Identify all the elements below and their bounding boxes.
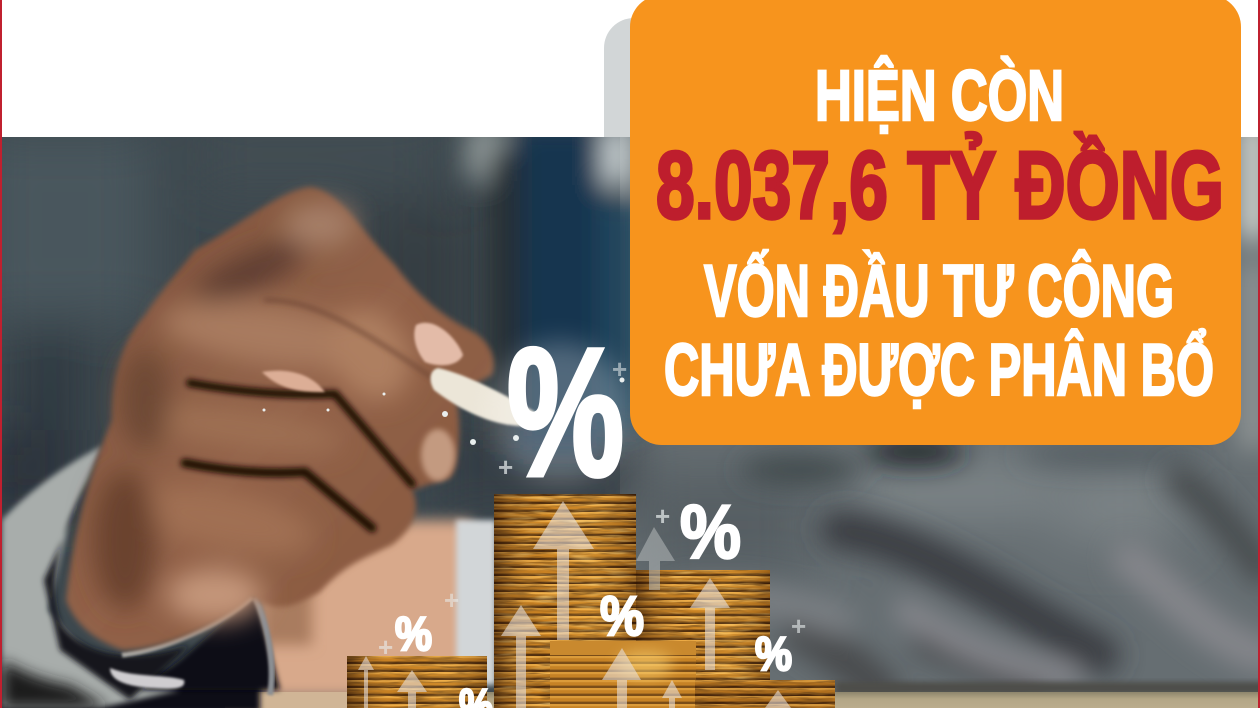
jacket folds	[770, 460, 1258, 684]
finger highlights	[93, 203, 427, 621]
lower fingertip	[421, 429, 455, 481]
small percent signs: %	[680, 490, 741, 575]
small percent signs: %	[755, 627, 792, 680]
blurred wrist and shirt	[262, 520, 496, 698]
sparkles and plus signs: +	[791, 611, 806, 641]
finger creases	[185, 300, 450, 528]
sparkles and plus signs: +	[378, 632, 393, 662]
fingernail	[414, 323, 463, 365]
small percent signs: %	[395, 607, 432, 660]
rising arrows	[358, 501, 791, 708]
sparkles and plus signs: +	[612, 354, 627, 384]
small percent signs: %	[600, 584, 644, 647]
front centre stack	[550, 641, 696, 708]
white pen tip	[431, 368, 535, 426]
left stack	[347, 656, 487, 708]
table edge	[225, 692, 1260, 708]
sparkles and plus signs: +	[444, 585, 459, 615]
small percent signs	[395, 490, 792, 708]
big percent sign with glow	[480, 330, 637, 493]
heading line 1: HIỆN CÒN	[815, 56, 1064, 136]
orange callout panel	[630, 0, 1241, 445]
dark band above table	[835, 682, 1260, 694]
right border stripe	[1258, 0, 1260, 708]
ring finger gap highlight	[262, 371, 325, 392]
sleeve and cuff	[0, 446, 280, 708]
big percent sign with glow: %	[507, 310, 624, 514]
tall centre stack	[494, 494, 636, 708]
grey backing panel	[604, 18, 804, 218]
hand	[66, 187, 494, 650]
sparkles and plus signs: +	[498, 452, 513, 482]
right low stack	[695, 680, 835, 708]
sparkles and plus signs: +	[655, 501, 670, 531]
right stack	[636, 570, 770, 680]
left border stripe	[0, 0, 2, 708]
sparkles and plus signs	[262, 354, 806, 662]
coin stacks	[347, 494, 835, 708]
